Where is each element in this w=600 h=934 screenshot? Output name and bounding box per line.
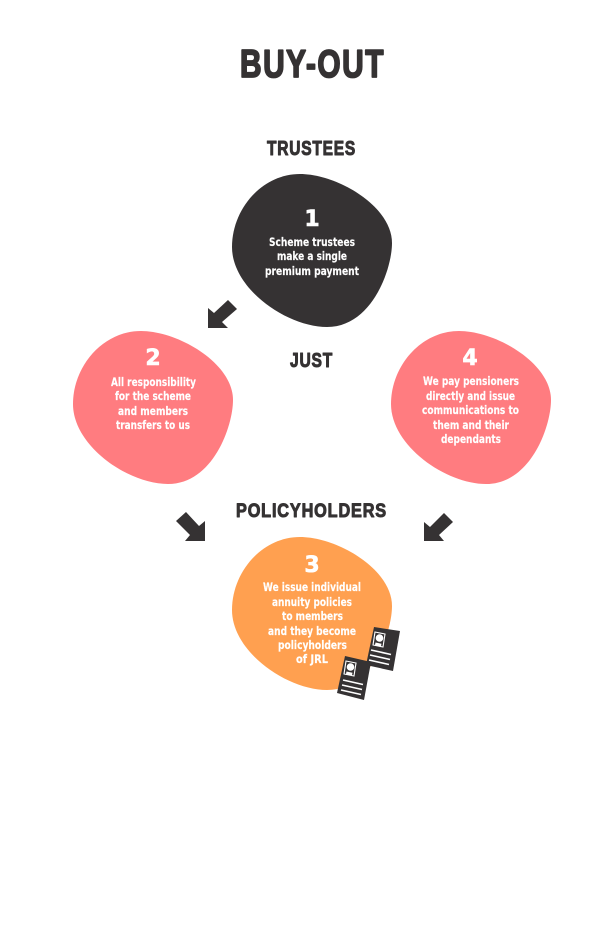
panel: step 2: and members <box>118 404 188 418</box>
panel: step 4: We pay pensioners <box>423 374 519 388</box>
heading: trustees: TRUSTEES <box>267 137 356 160</box>
panel: step 1: Scheme trustees <box>269 235 355 249</box>
panel: step 1: premium payment <box>265 264 359 278</box>
arrow: step 4 to step 3 <box>424 513 453 541</box>
panel: step 3: annuity policies <box>272 595 352 609</box>
panel: step 3: to members <box>282 609 343 623</box>
panel: step 3 <box>232 537 392 690</box>
panel: step 4: them and their <box>433 418 509 432</box>
panel: step 3: of JRL <box>296 652 329 666</box>
panel: step 4: directly and issue <box>426 389 515 403</box>
panel: step 4 <box>391 331 551 484</box>
panel: step 1: make a single <box>277 249 347 263</box>
panel: step 1 <box>232 174 392 327</box>
icon: policy document, upper <box>366 627 400 671</box>
panel: step 2: All responsibility <box>111 375 196 389</box>
panel: step 3: and they become <box>268 624 356 638</box>
panel: step 3: 3 <box>304 553 320 578</box>
panel: step 4: communications to <box>422 403 519 417</box>
arrow: step 1 to step 2 <box>208 300 237 328</box>
panel: step 2: 2 <box>145 346 161 371</box>
panel: step 1: 1 <box>304 207 320 232</box>
panel: step 3: We issue individual <box>263 580 361 594</box>
panel: step 3: policyholders <box>278 638 347 652</box>
panel: step 2: transfers to us <box>116 418 190 432</box>
panel: step 4: 4 <box>462 346 478 371</box>
arrow: step 2 to step 3 <box>176 512 205 541</box>
heading: policyholders: POLICYHOLDERS <box>236 500 387 522</box>
title: BUY-OUT <box>240 43 385 86</box>
heading: just: JUST <box>290 349 333 372</box>
panel: step 2 <box>73 331 233 484</box>
panel: step 4: dependants <box>441 432 501 446</box>
panel: step 2: for the scheme <box>115 389 191 403</box>
icon: policy document, lower <box>337 656 371 700</box>
